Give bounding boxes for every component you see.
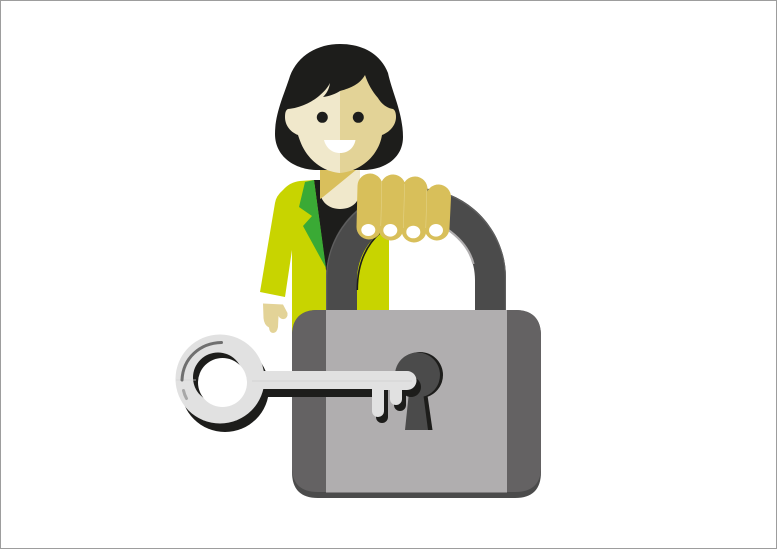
right jacket panel [345, 225, 389, 315]
padlock [292, 188, 541, 498]
green lapel [299, 180, 326, 268]
face [285, 75, 396, 173]
hair [275, 44, 403, 170]
eyes [317, 112, 364, 123]
neck [320, 160, 360, 209]
jacket [260, 180, 389, 345]
black shirt [314, 180, 380, 300]
person [260, 44, 403, 345]
key shadow [181, 344, 421, 432]
fingernails [361, 224, 443, 238]
lock body [292, 310, 541, 498]
hand: lowered left hand [263, 304, 288, 333]
keyhole [395, 352, 443, 430]
shackle [326, 188, 506, 312]
key bow and shaft [176, 334, 416, 424]
hand gripping the shackle [361, 182, 443, 238]
smile [324, 140, 356, 153]
key [176, 334, 421, 432]
